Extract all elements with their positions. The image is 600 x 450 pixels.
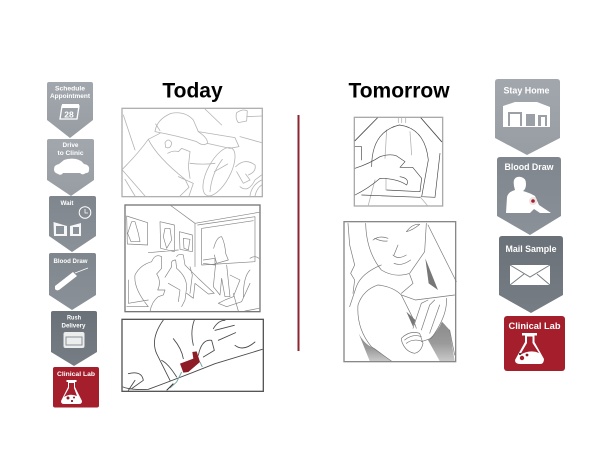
- step: Blood Draw (today): [49, 253, 96, 310]
- icon: clock: [79, 207, 91, 218]
- shaded shadow areas: [359, 258, 455, 361]
- step: Blood Draw (tomorrow): Blood Draw: [504, 162, 554, 173]
- step: Drive to Clinic: Drive: [62, 142, 79, 149]
- step: Wait: Wait: [60, 200, 74, 207]
- step: Rush Delivery: Delivery: [62, 322, 86, 330]
- title: Today: Today: [162, 80, 223, 102]
- icon: envelope: [510, 265, 550, 285]
- step: Clinical Lab (today): Clinical Lab: [57, 371, 95, 378]
- arm and sun visor: [198, 132, 262, 148]
- icon: calendar: 28: [64, 110, 74, 120]
- step: Mail Sample: [499, 236, 563, 313]
- step: Clinical Lab (tomorrow): [504, 316, 565, 371]
- panel: waiting room: [125, 205, 260, 312]
- step: Mail Sample: Mail Sample: [506, 244, 556, 255]
- step: Clinical Lab (today): [53, 367, 99, 408]
- panel: sample kit in mailbox: [354, 117, 443, 206]
- center divider line: [298, 115, 300, 351]
- icon: package: [64, 332, 84, 348]
- dashboard: [236, 162, 262, 196]
- panel: self blood draw on arm: [344, 222, 456, 362]
- panel: finger-stick blood draw: [122, 319, 263, 391]
- icon: car: [54, 159, 89, 175]
- step: Rush Delivery: [51, 311, 97, 366]
- step: Schedule Appointment: Appointment: [50, 93, 91, 100]
- cap and brim: [155, 113, 207, 145]
- seated patients: [127, 254, 214, 312]
- red blood collection tube: [180, 351, 200, 373]
- seated patient at right: [218, 257, 259, 311]
- icon: house: [503, 102, 550, 127]
- step: Blood Draw (tomorrow): [497, 157, 561, 235]
- standing nurse: [203, 237, 230, 297]
- step: Drive to Clinic: [47, 139, 94, 196]
- panel: driver in car: [122, 108, 262, 201]
- step: Schedule Appointment: [47, 82, 93, 138]
- step: Blood Draw (today): Blood Draw: [54, 258, 88, 265]
- icon: syringe: [55, 268, 88, 290]
- icon: flask: [515, 333, 544, 364]
- step: Stay Home: Stay Home: [504, 86, 550, 96]
- step: Stay Home: [495, 79, 560, 155]
- step: Schedule Appointment: Schedule: [55, 86, 86, 92]
- step: Drive to Clinic: to Clinic: [58, 150, 84, 157]
- woman, arm and device: [348, 223, 456, 361]
- icon: person with blood-draw device: [506, 177, 551, 213]
- step: Rush Delivery: Rush: [67, 314, 81, 322]
- icon: magazine: [54, 222, 81, 236]
- driver body: [122, 133, 215, 196]
- room, window and pictures: [127, 205, 259, 267]
- icon: flask: [61, 380, 82, 404]
- title: Tomorrow: Tomorrow: [348, 80, 450, 102]
- steering wheel: [196, 143, 242, 201]
- step: Wait: [49, 196, 96, 252]
- step: Clinical Lab (tomorrow): Clinical Lab: [508, 321, 561, 332]
